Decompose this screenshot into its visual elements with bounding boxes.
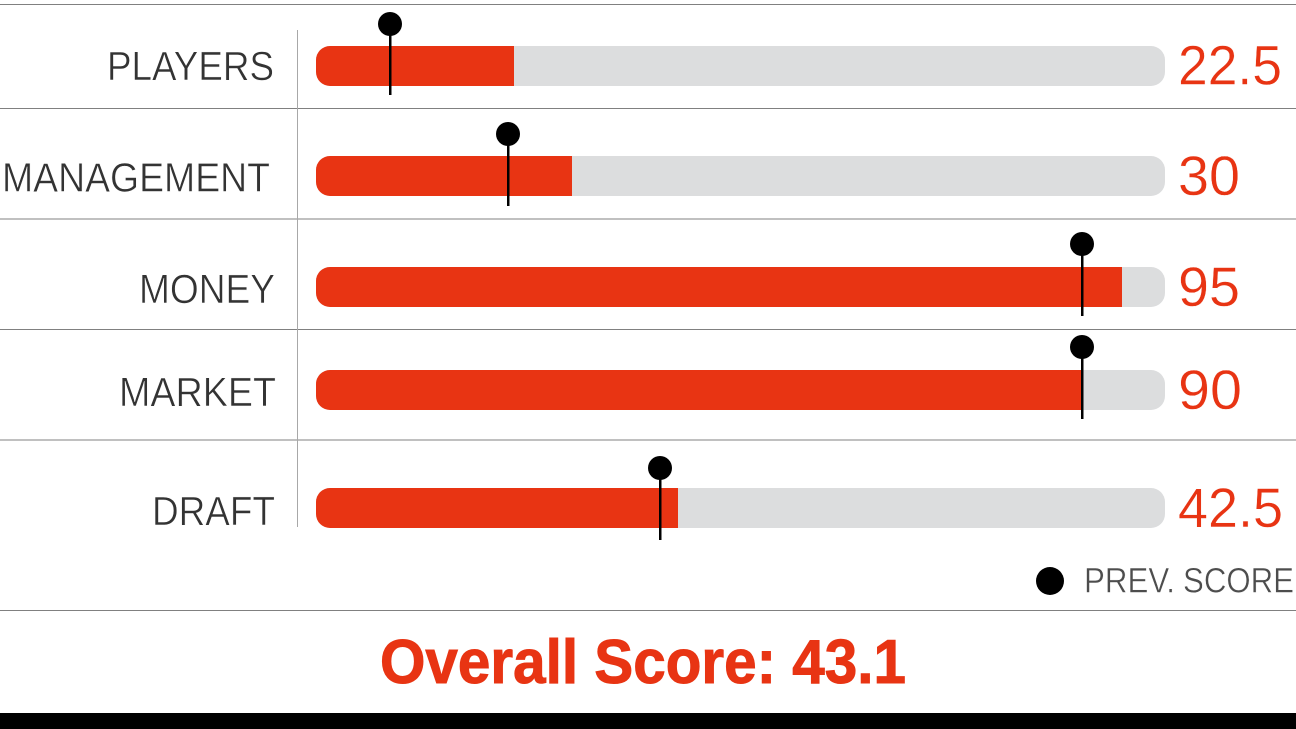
row: management	[2, 122, 1240, 207]
row: draft	[152, 456, 1283, 540]
row: market	[119, 335, 1242, 421]
previous score marker: money	[1070, 232, 1094, 316]
previous score marker: market	[1070, 335, 1094, 419]
bar value: market	[316, 370, 1082, 410]
label: management: MANAGEMENT	[2, 154, 270, 200]
previous score marker: management	[496, 122, 520, 206]
overall score: Overall Score: 43.1	[380, 628, 906, 697]
previous score marker: players	[378, 12, 402, 95]
bar value: management	[316, 156, 572, 196]
bar track: players	[316, 46, 1165, 86]
bar track: management	[316, 156, 1165, 196]
label: draft: DRAFT	[152, 488, 275, 534]
bar value: draft	[316, 488, 678, 528]
label: money: MONEY	[139, 266, 275, 312]
bar value: players	[316, 46, 514, 86]
row: players	[107, 12, 1282, 96]
bar track: money	[316, 267, 1165, 307]
value: draft: 42.5	[1178, 476, 1283, 539]
value: money: 95	[1178, 255, 1240, 318]
bar track: market	[316, 370, 1165, 410]
label: market: MARKET	[119, 369, 276, 415]
bar value: money	[316, 267, 1122, 307]
value: management: 30	[1178, 144, 1240, 207]
previous score marker: draft	[648, 456, 672, 540]
value: players: 22.5	[1178, 34, 1282, 96]
bar track: draft	[316, 488, 1165, 528]
legend: previous score: PREV.	[1084, 562, 1175, 600]
bottom black band	[0, 713, 1296, 729]
row: money	[139, 232, 1240, 318]
label: players: PLAYERS	[107, 43, 274, 89]
value: market: 90	[1178, 358, 1242, 421]
legend: previous score	[1036, 562, 1294, 600]
